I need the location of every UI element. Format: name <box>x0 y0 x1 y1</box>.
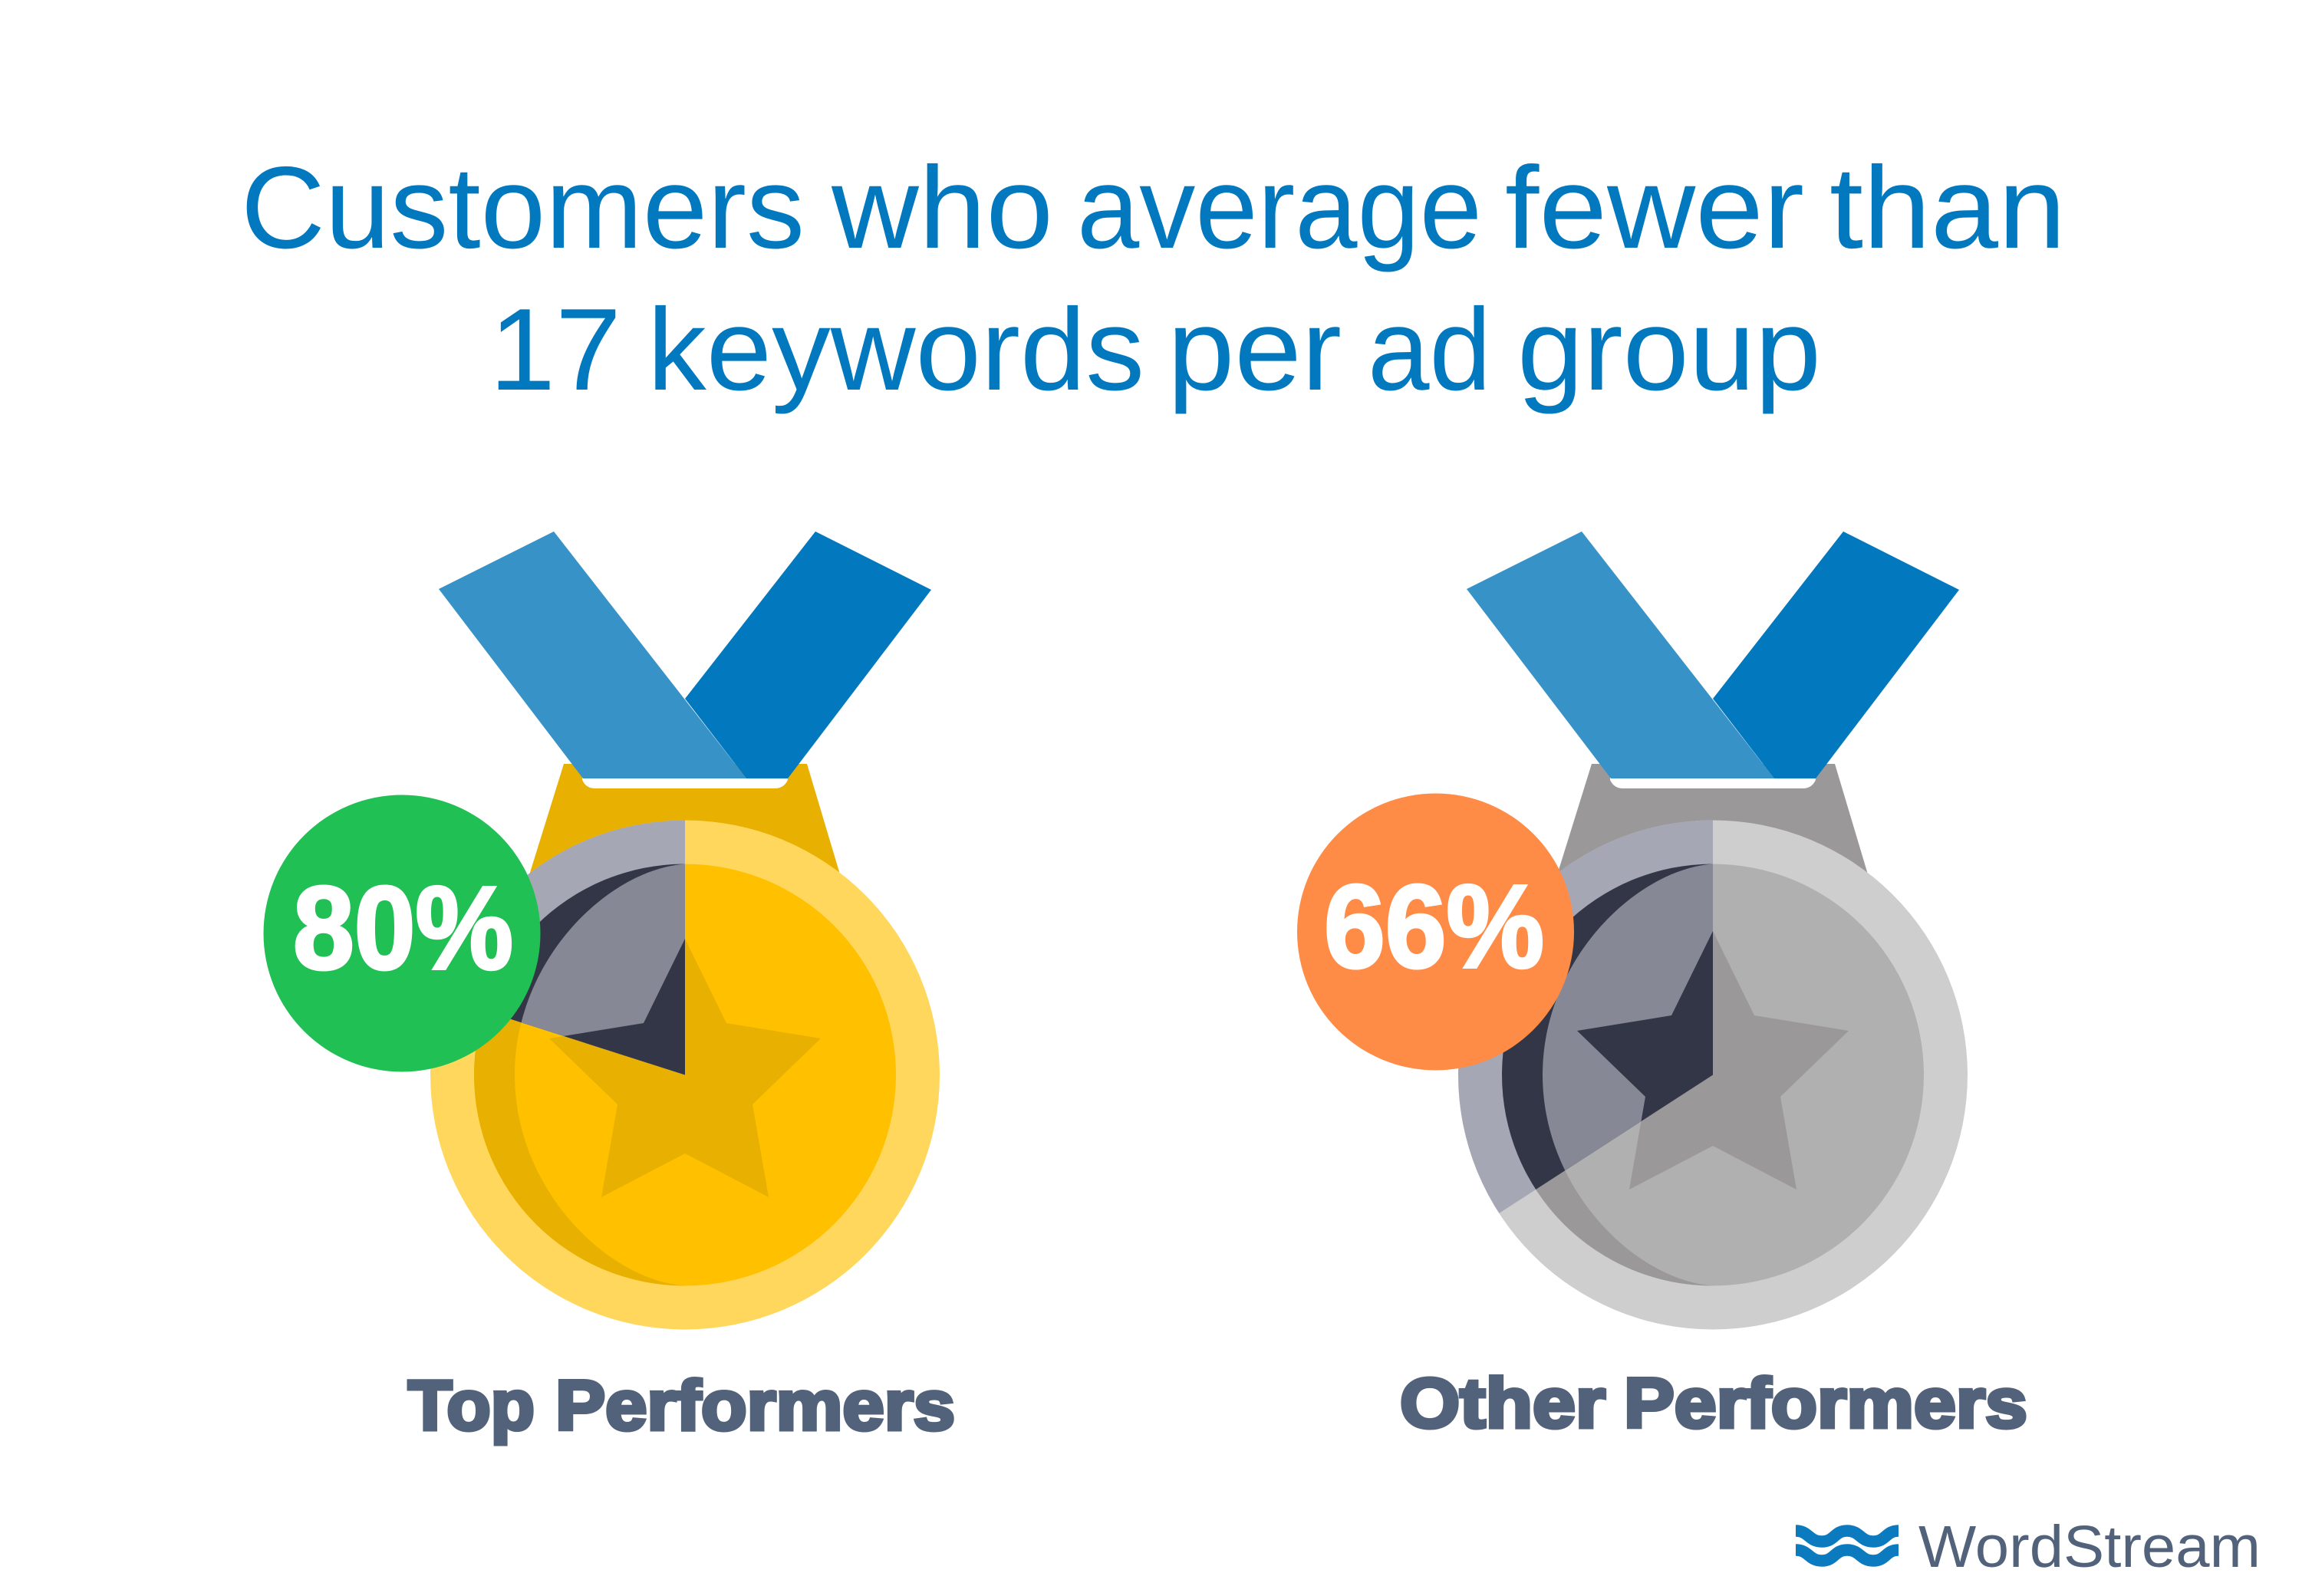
label: top performers: Performers <box>555 1367 955 1445</box>
icon: silver medal disc <box>1458 821 1968 1330</box>
title: per <box>1167 285 1342 415</box>
panel: other performers silver medal <box>1297 531 2027 1443</box>
text: wordmark: WordStream <box>1918 1514 2261 1580</box>
icon: ribbon right <box>685 531 931 778</box>
callout: 80 percent badge <box>264 795 540 1072</box>
icon: gold medal connector <box>525 764 845 890</box>
title: ad <box>1368 285 1491 415</box>
title: who <box>831 143 1053 273</box>
title: than <box>1829 143 2066 273</box>
icon: ribbon slot <box>1610 778 1816 788</box>
label: top performers: Top <box>408 1367 535 1445</box>
callout: 66 percent badge: 66% <box>1324 861 1544 992</box>
chart: 34 percent wedge on silver medal <box>1458 821 1713 1213</box>
icon: silver medal connector <box>1553 764 1872 890</box>
label: top performers <box>408 1367 955 1445</box>
chart: 20 percent wedge on gold medal <box>511 821 685 1075</box>
panel: top performers gold medal <box>264 531 955 1445</box>
label: other performers: Other <box>1400 1364 1605 1443</box>
icon: ribbon left <box>1467 531 1774 778</box>
callout: 66 percent badge <box>1297 793 1574 1071</box>
title: average <box>1077 143 1482 273</box>
icon: waves <box>1783 1531 1910 1561</box>
callout: 80 percent badge: 80% <box>293 862 513 994</box>
title: fewer <box>1505 143 1804 273</box>
label: other performers <box>1400 1364 2027 1443</box>
title <box>241 143 2066 415</box>
icon: ribbon slot <box>582 778 788 788</box>
title: keywords <box>647 285 1144 415</box>
icon: gold medal disc <box>430 821 940 1330</box>
label: other performers: Performers <box>1624 1364 2027 1443</box>
title: Customers <box>241 143 805 273</box>
logo: WordStream <box>1796 1524 2257 1568</box>
title: 17 <box>489 285 621 415</box>
icon: ribbon left <box>439 531 746 778</box>
icon: ribbon right <box>1713 531 1959 778</box>
title: group <box>1517 285 1821 415</box>
